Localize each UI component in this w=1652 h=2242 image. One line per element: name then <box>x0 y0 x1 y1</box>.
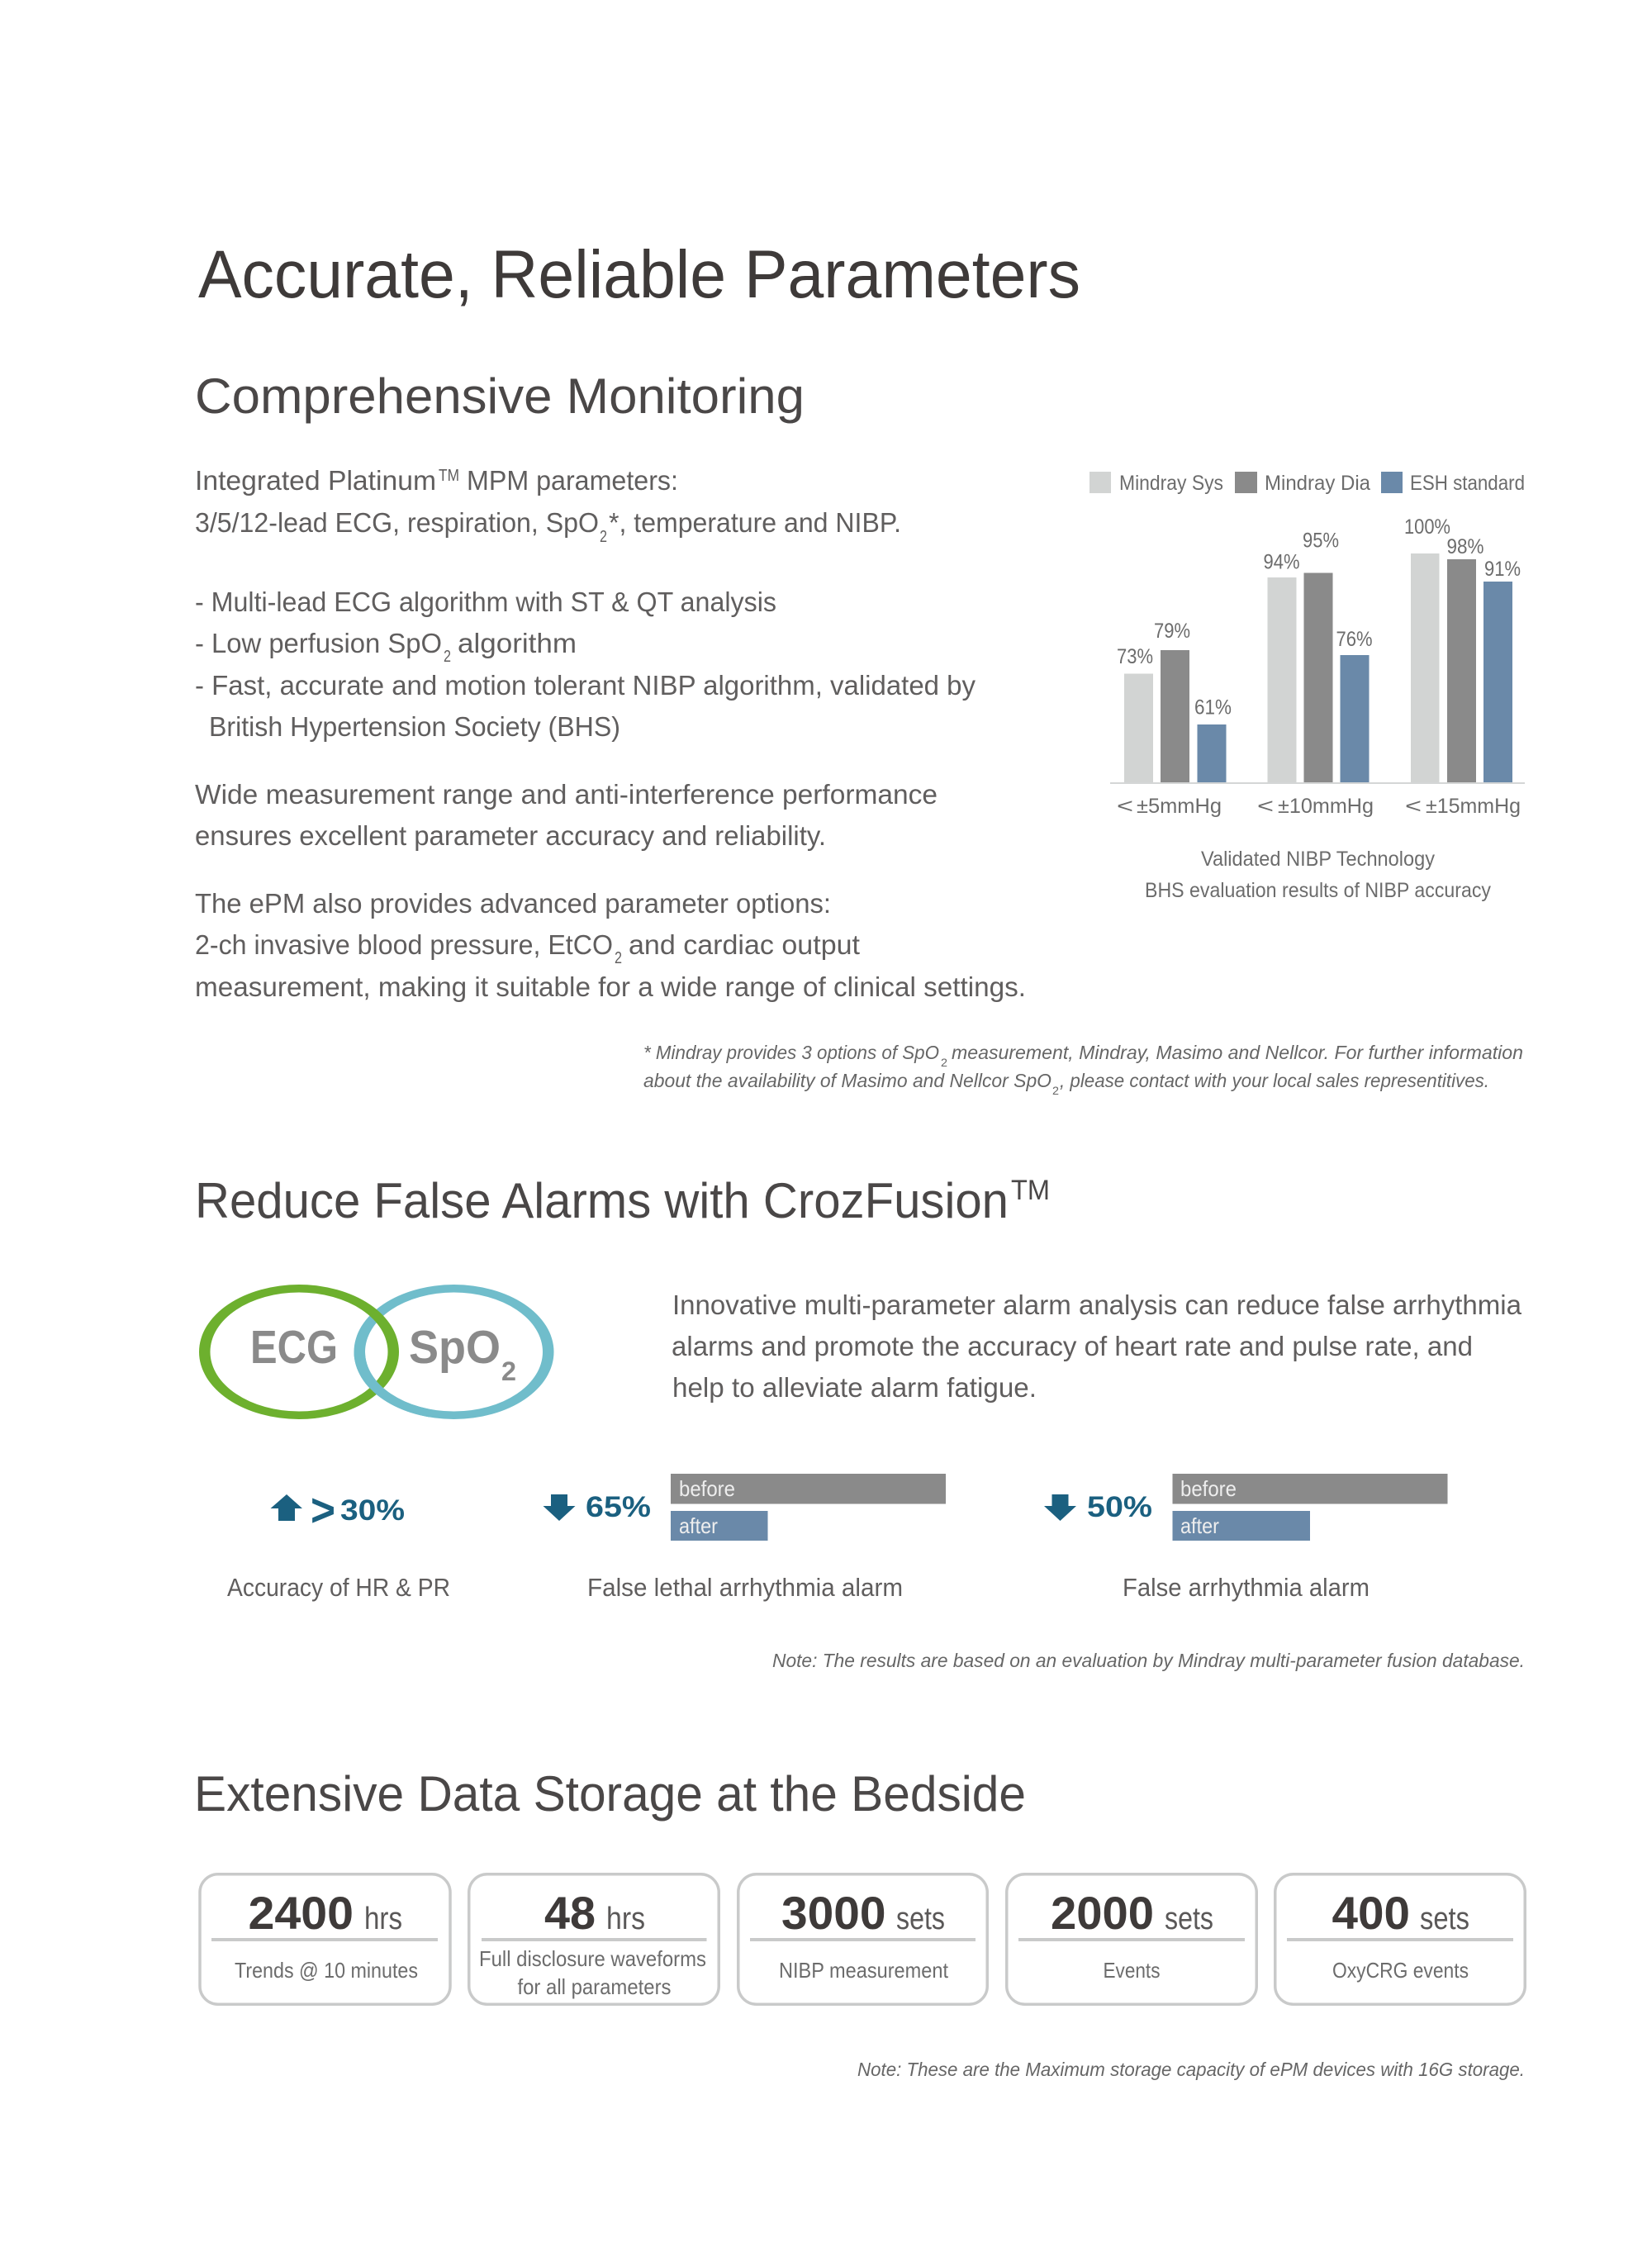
chart caption: Validated NIBP Technology <box>1201 848 1435 871</box>
stat: false lethal arrhythmia alarm: after <box>679 1513 718 1538</box>
card: NIBP measurement: sets <box>896 1902 945 1936</box>
stat: accuracy of HR and PR: > <box>311 1484 335 1536</box>
text block: advanced parameter options: The ePM also provides advanced parameter options: <box>195 888 831 919</box>
axis labels: ±10mmHg <box>1278 795 1374 818</box>
bar group: under 10 mmHg: 76% <box>1336 628 1373 651</box>
text block: advanced parameter options: measurement, making it suitable for a wide range of clinical settings. <box>195 971 1026 1002</box>
card: events: 2000 <box>1051 1887 1154 1939</box>
card: OxyCRG events: OxyCRG events <box>1332 1958 1469 1983</box>
bar group: under 15 mmHg: 98% <box>1447 535 1483 558</box>
text block: measurement range: Wide measurement range and anti-interference performance <box>195 779 938 810</box>
card: NIBP measurement: 3000 <box>781 1887 885 1939</box>
stat: accuracy of HR and PR <box>227 1484 450 1602</box>
card: events <box>1007 1874 1256 2004</box>
text block: alarm analysis description <box>672 1290 1522 1403</box>
card: events: Events <box>1104 1958 1160 1983</box>
card: trends <box>200 1874 450 2004</box>
stat: false arrhythmia alarm: before <box>1180 1476 1237 1501</box>
bar group: under 10 mmHg: 94% <box>1264 550 1300 573</box>
stat: false arrhythmia alarm: False arrhythmia alarm <box>1123 1573 1370 1602</box>
text block: advanced parameter options: and cardiac output <box>629 929 860 960</box>
stat: false lethal arrhythmia alarm: False lethal arrhythmia alarm <box>587 1573 903 1602</box>
stat: accuracy of HR and PR: Accuracy of HR & PR <box>227 1573 450 1602</box>
bar group: under 15 mmHg: 100% <box>1404 515 1450 539</box>
text block: integrated parameters <box>195 465 901 546</box>
text block: integrated parameters: TM <box>439 467 459 485</box>
bar group: under 5 mmHg: 61% <box>1194 696 1232 719</box>
card: full disclosure waveforms: 48 <box>544 1887 596 1939</box>
text block: algorithm list: algorithm <box>458 628 577 658</box>
card: trends: 2400 <box>248 1887 354 1939</box>
stat: false arrhythmia alarm: after <box>1180 1513 1219 1538</box>
text block: algorithm list: - Multi-lead ECG algorithm with ST & QT analysis <box>195 587 776 617</box>
stat: false lethal arrhythmia alarm: before <box>679 1476 735 1501</box>
panel: comprehensive monitoring <box>195 368 1523 1097</box>
stat: false lethal arrhythmia alarm: 65% <box>586 1491 651 1523</box>
text block: algorithm list: - Low perfusion SpO <box>195 628 442 658</box>
card: full disclosure waveforms: for all parameters <box>517 1974 671 1999</box>
text block: integrated parameters: *, temperature and NIBP. <box>609 507 901 538</box>
card: OxyCRG events <box>1275 1874 1525 2004</box>
footnote: SpO2 options: measurement, Mindray, Masimo and Nellcor. For further information <box>952 1042 1523 1063</box>
text block: integrated parameters: Integrated Platinum <box>195 465 436 496</box>
stat: false arrhythmia alarm <box>1044 1474 1447 1602</box>
card: events: sets <box>1165 1902 1213 1936</box>
axis labels: < <box>1405 795 1422 818</box>
text block: alarm analysis description: Innovative multi-parameter alarm analysis can reduce false arrhythmia <box>672 1290 1522 1320</box>
heading: comprehensive monitoring: Comprehensive Monitoring <box>195 368 805 424</box>
text block: integrated parameters: 3/5/12-lead ECG, respiration, SpO <box>195 507 599 538</box>
stat: false lethal arrhythmia alarm <box>544 1474 946 1602</box>
footnote: SpO2 options: , please contact with your local sales representitives. <box>1060 1070 1489 1091</box>
text block: algorithm list: 2 <box>444 648 451 666</box>
legend <box>1089 472 1525 495</box>
icon: down arrow <box>544 1494 575 1521</box>
panel: extensive data storage <box>194 1766 1525 2080</box>
legend: Mindray Dia <box>1265 472 1370 495</box>
card: full disclosure waveforms: hrs <box>606 1902 645 1936</box>
chart caption <box>1145 848 1491 902</box>
icon: ECG and SpO2 linked rings: 2 <box>501 1356 516 1386</box>
bar group: under 10 mmHg: 95% <box>1303 529 1339 552</box>
note: storage capacity: Note: These are the Maximum storage capacity of ePM devices with 16G storage. <box>857 2059 1525 2080</box>
panel: reduce false alarms <box>195 1173 1525 1671</box>
axis labels: < <box>1257 795 1274 818</box>
bar chart: BHS evaluation of NIBP accuracy <box>1089 472 1525 902</box>
card: NIBP measurement <box>738 1874 987 2004</box>
bar group: under 15 mmHg: 91% <box>1484 558 1521 581</box>
text block: alarm analysis description: help to alleviate alarm fatigue. <box>672 1372 1037 1403</box>
text block: integrated parameters: MPM parameters: <box>467 465 678 496</box>
heading: reduce false alarms: Reduce False Alarms with CrozFusion <box>195 1173 1009 1228</box>
axis labels: < <box>1117 795 1133 818</box>
footnote: SpO2 options: 2 <box>941 1056 947 1069</box>
icon: ECG and SpO2 linked rings: ECG <box>250 1321 338 1374</box>
text block: advanced parameter options <box>195 888 1026 1002</box>
text block: algorithm list: British Hypertension Society (BHS) <box>209 711 620 742</box>
icon: ECG and SpO2 linked rings <box>199 1285 553 1419</box>
text block: measurement range: ensures excellent parameter accuracy and reliability. <box>195 820 826 851</box>
bar group: under 5 mmHg: 73% <box>1117 645 1153 668</box>
text block: alarm analysis description: alarms and promote the accuracy of heart rate and pulse rate, and <box>672 1331 1473 1361</box>
bar group: under 10 mmHg <box>1264 529 1373 782</box>
card: OxyCRG events: 400 <box>1332 1887 1410 1939</box>
card: full disclosure waveforms <box>469 1874 719 2004</box>
text block: advanced parameter options: 2 <box>615 949 622 967</box>
card: trends: Trends @ 10 minutes <box>235 1958 418 1983</box>
footnote: SpO2 options: about the availability of Masimo and Nellcor SpO <box>643 1070 1051 1091</box>
legend: Mindray Sys <box>1119 472 1223 495</box>
legend: ESH standard <box>1410 472 1525 495</box>
icon: ECG and SpO2 linked rings: SpO <box>409 1321 501 1374</box>
text block: integrated parameters: 2 <box>600 528 607 546</box>
chart caption: BHS evaluation results of NIBP accuracy <box>1145 879 1491 902</box>
card: OxyCRG events: sets <box>1420 1902 1469 1936</box>
footnote: SpO2 options: * Mindray provides 3 options of SpO <box>643 1042 939 1063</box>
footnote: SpO2 options: 2 <box>1052 1084 1059 1097</box>
text block: measurement range <box>195 779 938 851</box>
bar group: under 5 mmHg: 79% <box>1154 620 1190 643</box>
note: evaluation basis: Note: The results are based on an evaluation by Mindray multi-parameter fusion database. <box>772 1650 1525 1671</box>
bar group: under 15 mmHg <box>1404 515 1521 782</box>
heading: extensive data storage: Extensive Data Storage at the Bedside <box>194 1766 1026 1822</box>
bar group: under 5 mmHg <box>1117 620 1232 782</box>
card: full disclosure waveforms: Full disclosure waveforms <box>479 1946 706 1971</box>
heading: reduce false alarms: TM <box>1011 1175 1050 1206</box>
axis labels: ±15mmHg <box>1426 795 1521 818</box>
title: Accurate, Reliable Parameters <box>198 237 1080 312</box>
stat: false arrhythmia alarm: 50% <box>1087 1491 1152 1523</box>
stat: accuracy of HR and PR: 30% <box>340 1494 405 1527</box>
card: NIBP measurement: NIBP measurement <box>779 1958 949 1983</box>
axis labels <box>1117 795 1521 818</box>
text block: algorithm list: - Fast, accurate and motion tolerant NIBP algorithm, validated by <box>195 670 976 701</box>
text block: algorithm list <box>195 587 976 742</box>
text block: advanced parameter options: 2-ch invasive blood pressure, EtCO <box>195 929 613 960</box>
axis labels: ±5mmHg <box>1137 795 1222 818</box>
icon: up arrow <box>271 1494 302 1521</box>
icon: down arrow <box>1044 1494 1076 1521</box>
footnote: SpO2 options <box>643 1042 1523 1097</box>
card: trends: hrs <box>364 1902 402 1936</box>
